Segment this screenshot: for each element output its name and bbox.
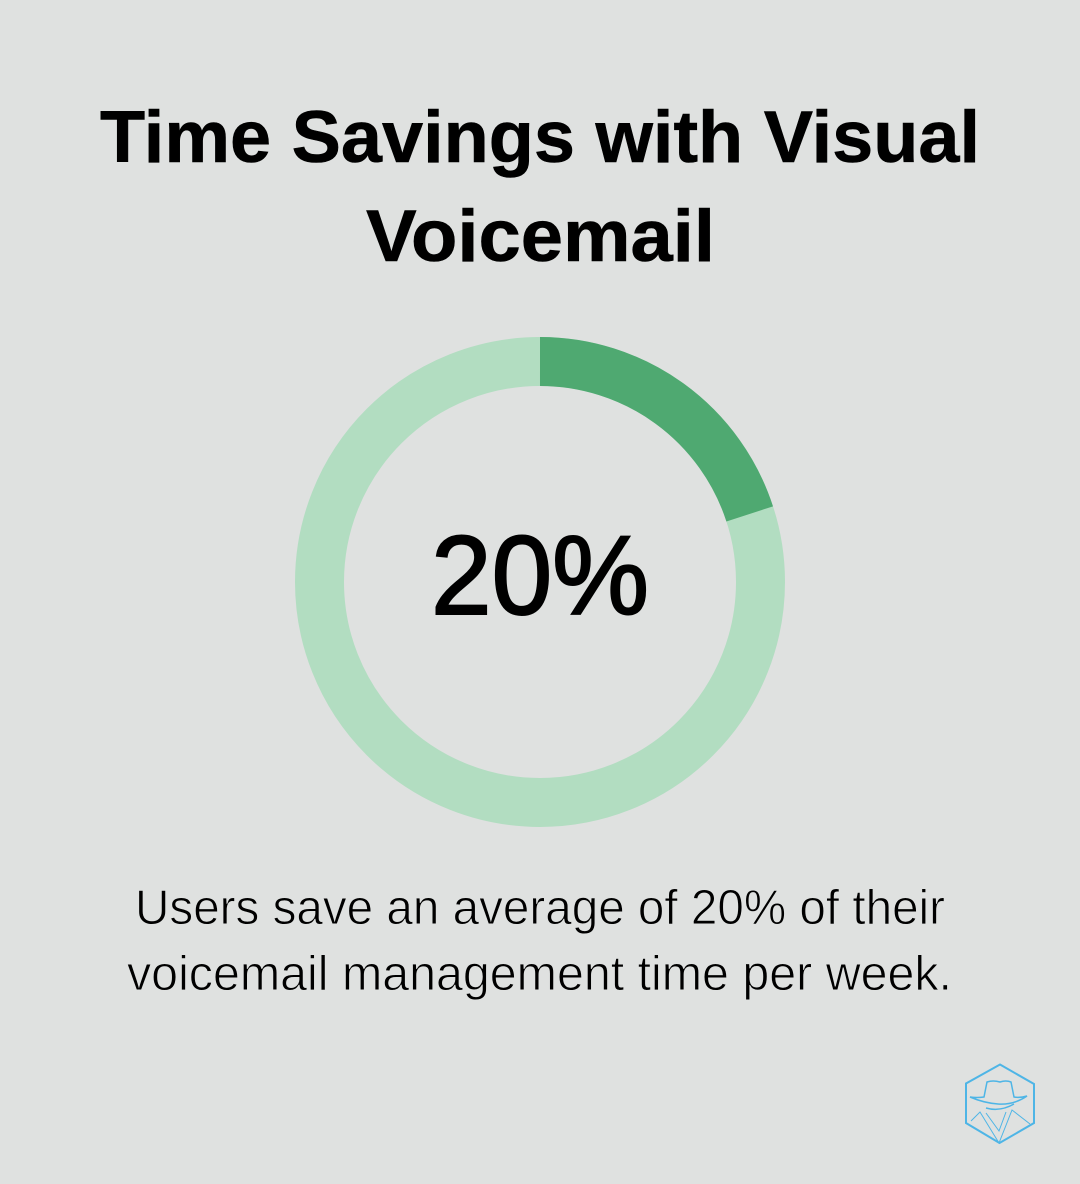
title: Voicemail [366,196,715,277]
description: voicemail management time per week. [127,947,952,1001]
title: Time Savings with Visual [100,97,980,178]
description: Users save an average of 20% of their [135,881,945,935]
center value: 20% [431,513,649,638]
icon: spy logo [966,1064,1034,1143]
title [100,97,980,277]
description [127,881,952,1001]
donut chart: 20% [320,362,760,802]
